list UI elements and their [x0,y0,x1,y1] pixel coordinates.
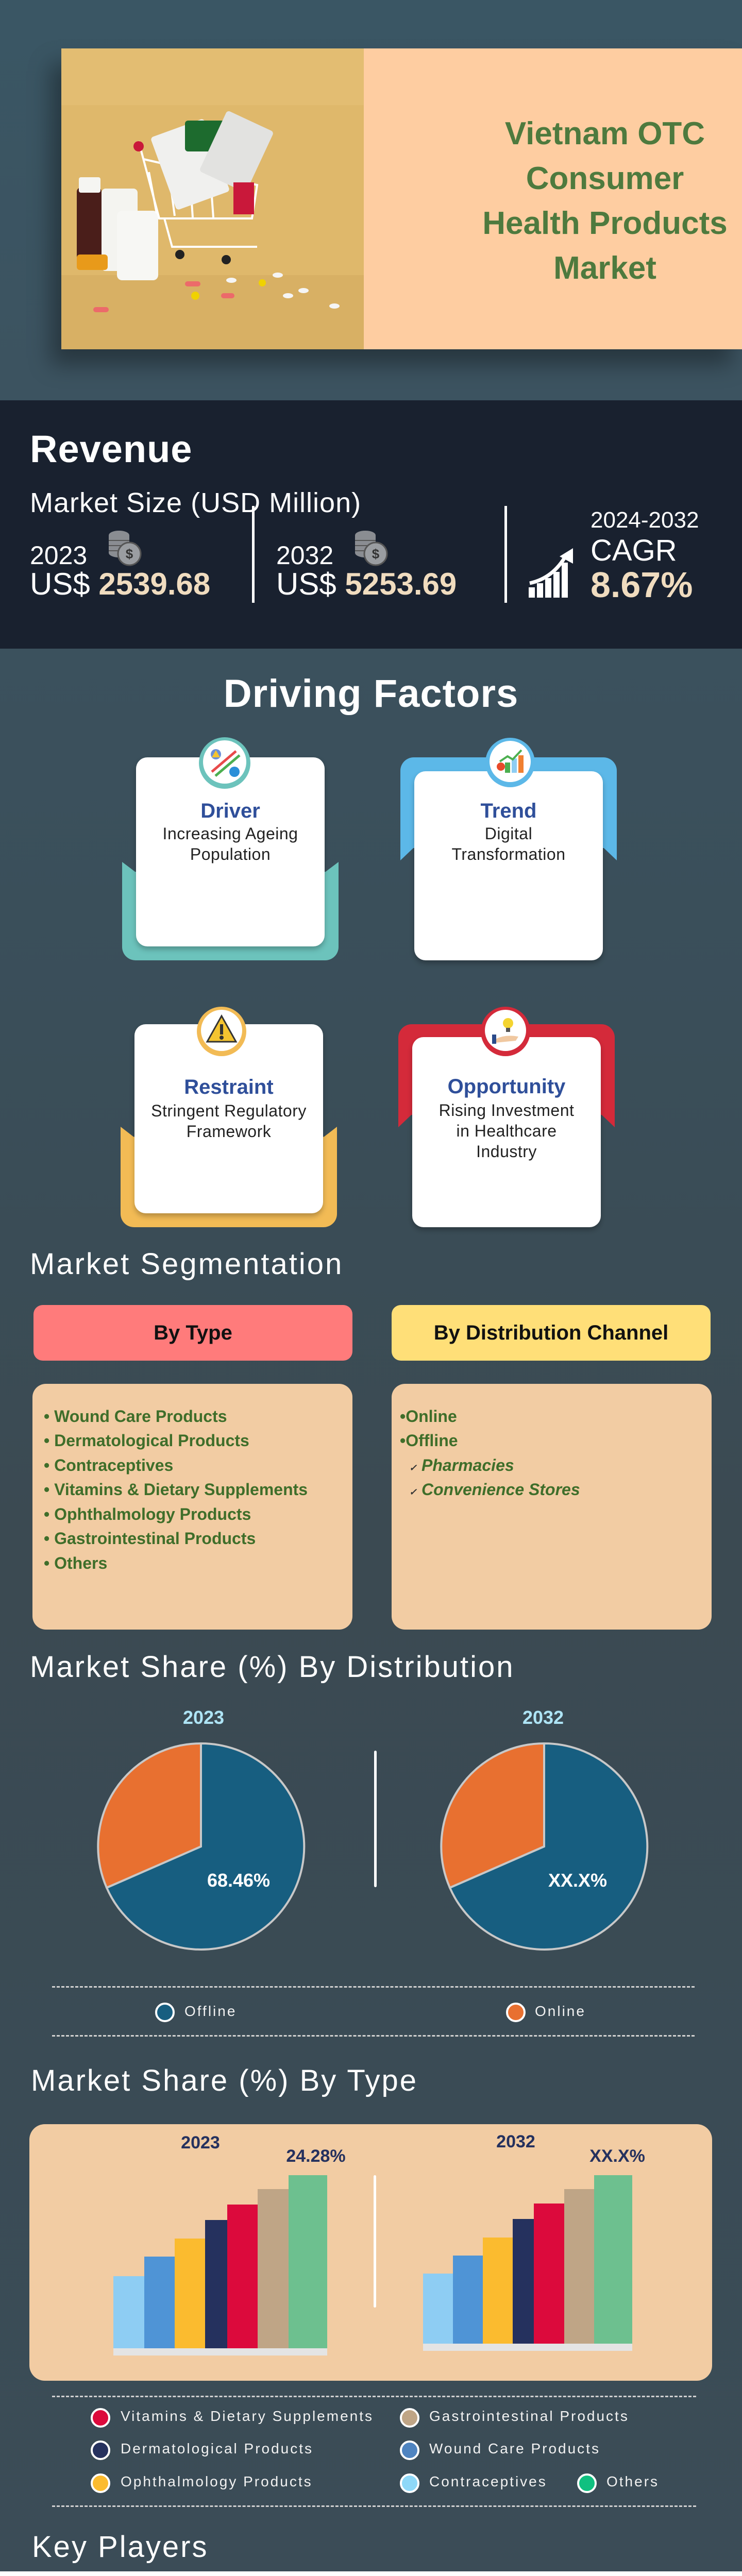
icon: trend chart [486,738,534,787]
icon: opportunity bulb [481,1007,530,1056]
divider [374,1751,377,1887]
card: Opportunity: in Healthcare [456,1122,557,1140]
panel: bar charts [29,2124,712,2381]
icon: growth chart [529,548,573,598]
header banner [61,48,742,349]
divider [252,506,255,603]
panel: type list: • Wound Care Products [44,1407,227,1426]
card: Driver: Increasing Ageing [163,824,298,843]
icon: coins [355,531,387,566]
CAGR: 2024-2032 [591,507,699,533]
panel: type list: • Vitamins & Dietary Supplements [44,1480,308,1499]
card: Opportunity: Industry [476,1142,537,1161]
panel: type list: • Dermatological Products [44,1431,249,1450]
card: Opportunity [398,1007,615,1231]
panel: type list: • Ophthalmology Products [44,1505,251,1523]
panel: distribution list: •Online [400,1407,457,1426]
market size label: Market Size (USD Million) [30,487,361,518]
2032 value: 2032 [276,541,333,570]
CAGR: 8.67% [591,565,693,605]
header photo: pharmacy cart [61,48,364,349]
pie chart 2023 [97,1707,305,1951]
header: By Distribution Channel [392,1305,711,1361]
title: Vietnam OTC [505,116,705,151]
legend: distribution: Online [535,2003,586,2019]
revenue band [0,400,742,649]
panel: distribution list: ✓ Pharmacies [409,1456,514,1475]
panel: type list: • Gastrointestinal Products [44,1529,256,1548]
legend: type: Vitamins & Dietary Supplements [121,2408,374,2424]
revenue heading: Revenue [30,428,192,470]
legend: type [52,2396,696,2507]
pie chart 2032: XX.X% [548,1870,607,1891]
title [482,116,728,286]
card: Restraint: Restraint [184,1076,274,1098]
pie chart 2032: 2032 [522,1707,564,1728]
bar chart 2032: 2032 [496,2132,535,2151]
bar chart 2023 [113,2133,346,2355]
pie chart 2032 [440,1707,648,1951]
bar chart 2023: 24.28% [286,2146,346,2166]
card: Opportunity: Rising Investment [439,1101,574,1120]
header: By Type [33,1305,352,1361]
panel: distribution list: ✓ Convenience Stores [409,1480,580,1499]
icon: coins [109,531,141,566]
card: Trend: Transformation [451,845,566,863]
panel: type list [32,1384,352,1630]
bar chart 2032 [423,2132,645,2351]
heading: Market Segmentation: Market Segmentation [30,1247,343,1281]
2032 value: US$ 5253.69 [276,567,457,601]
header: By Type: By Type [154,1321,232,1344]
2023 value [30,531,210,601]
legend: type: Contraceptives [429,2473,547,2489]
icon: driver gears [199,737,250,789]
divider [504,506,507,603]
CAGR: CAGR [591,534,677,567]
card: Trend: Trend [481,800,536,822]
pie chart 2023: 68.46% [207,1870,270,1891]
card: Restraint: Framework [187,1122,271,1141]
panel: type list: • Others [44,1554,107,1572]
card: Restraint: Stringent Regulatory [151,1101,307,1120]
panel: distribution list [392,1384,712,1630]
divider [374,2175,376,2308]
CAGR [591,507,699,605]
legend: type: Dermatological Products [121,2441,313,2456]
legend: distribution [52,1986,695,2037]
panel: key players logos [0,2571,742,2576]
header: By Distribution Channel: By Distribution Channel [434,1321,668,1344]
card: Driver: Driver [200,800,260,822]
pie chart 2023: 2023 [183,1707,224,1728]
heading: Key Players: Key Players [32,2530,208,2564]
legend: type: Ophthalmology Products [121,2473,313,2489]
legend: type: Others [606,2473,659,2489]
card: Driver: Population [190,845,271,863]
title: Market [553,250,656,286]
panel: distribution list: •Offline [400,1431,458,1450]
2023 value: 2023 [30,541,87,570]
2023 value: US$ 2539.68 [30,567,210,601]
icon: coins: $ [126,546,133,562]
title: Consumer [526,161,684,196]
card: Driver [122,737,339,960]
title: Health Products [482,206,728,241]
icon: coins: $ [372,546,380,562]
card: Trend: Digital [485,824,532,843]
card: Trend [400,738,617,964]
title panel [364,48,742,349]
legend: type: Gastrointestinal Products [429,2408,629,2424]
panel: type list: • Contraceptives [44,1456,173,1475]
heading: Driving Factors: Driving Factors [224,672,518,716]
icon: warning [197,1007,246,1056]
legend: type: Wound Care Products [429,2441,600,2456]
card: Opportunity: Opportunity [448,1075,565,1098]
card: Restraint [121,1007,337,1227]
bar chart 2032: XX.X% [589,2146,645,2166]
legend: distribution: Offline [184,2003,237,2019]
2032 value [276,531,457,601]
bar chart 2023: 2023 [181,2133,220,2153]
heading: Market Share By Distribution: Market Share (%) By Distribution [30,1650,514,1684]
heading: Market Share By Type: Market Share (%) By Type [31,2064,418,2097]
